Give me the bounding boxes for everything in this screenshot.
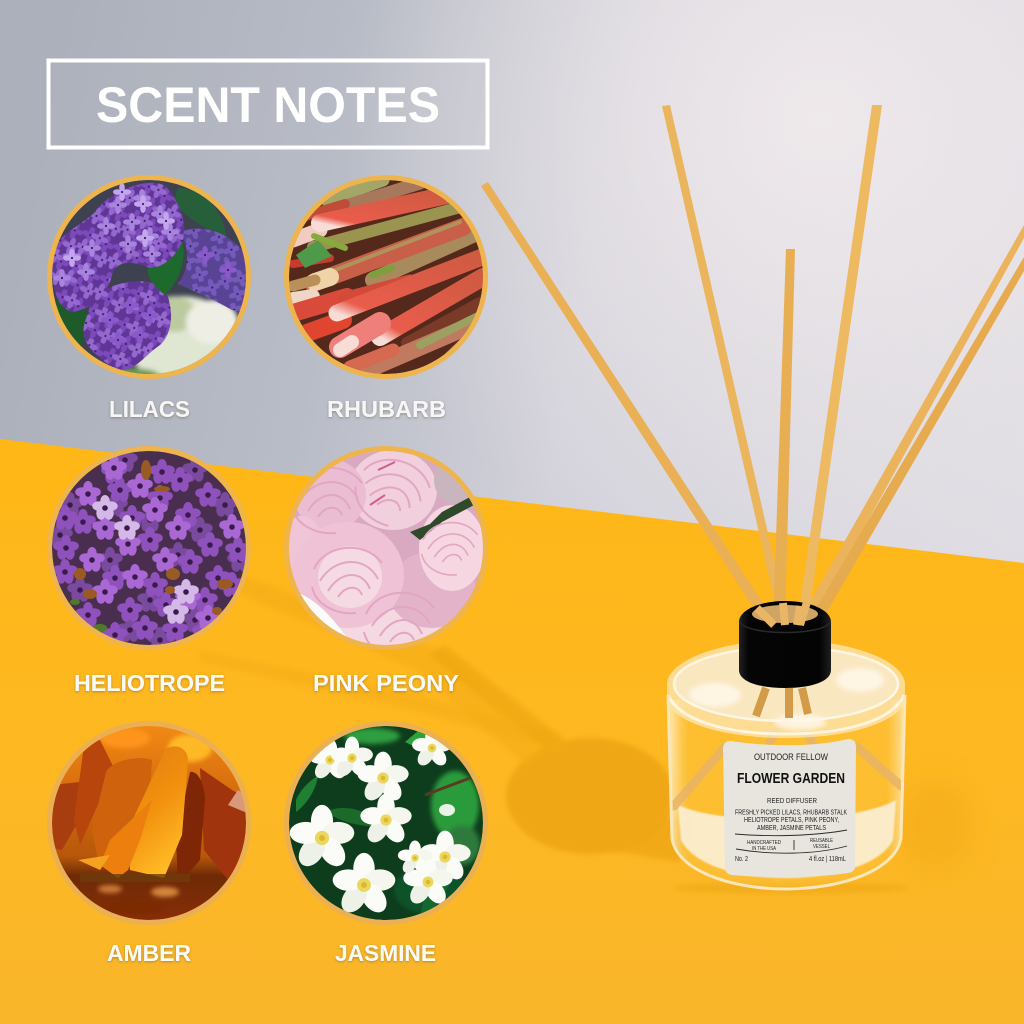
product label	[723, 739, 856, 877]
label footnotes: HANDCRAFTED	[747, 840, 781, 846]
peony photo circle	[289, 451, 483, 645]
title text: SCENT NOTES	[96, 77, 440, 133]
ingredients: AMBER, JASMINE PETALS	[757, 825, 826, 832]
label number and size	[735, 856, 846, 863]
lilacs ring	[50, 178, 248, 376]
ingredients: HELIOTROPE PETALS, PINK PEONY,	[744, 817, 839, 824]
glass bottle	[667, 640, 905, 890]
heliotrope photo circle	[52, 451, 246, 645]
panel: pink peony	[280, 448, 486, 696]
label number and size: No. 2	[735, 856, 748, 863]
heliotrope label: HELIOTROPE	[74, 670, 225, 696]
label footnotes: VESSEL	[813, 844, 830, 850]
lilacs photo circle	[50, 178, 250, 384]
flower clusters	[178, 229, 248, 312]
glass shoulder inner oval	[674, 647, 898, 721]
leaves	[174, 188, 226, 236]
label sticker	[723, 739, 856, 877]
panel: amber	[50, 724, 252, 966]
peony ring	[286, 448, 486, 648]
panel: rhubarb	[286, 178, 486, 422]
peony label: PINK PEONY	[313, 670, 459, 696]
glass outline	[668, 695, 905, 889]
label footnotes: REUSABLE	[810, 838, 833, 844]
table shadows cast by diffuser	[200, 570, 973, 894]
brand name: OUTDOOR FELLOW	[754, 752, 828, 763]
yellow table surface	[0, 439, 1024, 1024]
jasmine ring	[286, 724, 486, 922]
panel: heliotrope	[47, 447, 253, 696]
inner reeds seen through glass	[674, 728, 901, 806]
black cap	[739, 601, 831, 688]
rhubarb label: RHUBARB	[327, 396, 446, 422]
reeds	[481, 105, 1024, 624]
title border	[48, 60, 488, 148]
jasmine label: JASMINE	[335, 940, 436, 966]
amber ring	[50, 724, 248, 922]
label number and size: 4 fl.oz | 118mL	[809, 856, 846, 863]
glass body	[670, 700, 905, 890]
liquid reflection	[678, 800, 896, 878]
heliotrope ring	[50, 448, 248, 648]
glass shoulder	[667, 640, 905, 738]
lilacs label: LILACS	[109, 396, 190, 422]
title box	[48, 60, 488, 148]
reed diffuser product	[481, 105, 1024, 890]
label rules	[735, 830, 847, 853]
amber label: AMBER	[107, 940, 191, 966]
rhubarb photo circle	[286, 178, 486, 378]
rhubarb ring	[286, 178, 486, 376]
reeds under cap	[756, 688, 808, 718]
panel: jasmine	[286, 724, 486, 966]
panel: lilacs	[50, 178, 250, 422]
jasmine photo circle	[286, 724, 486, 924]
product type: REED DIFFUSER	[767, 796, 817, 805]
amber photo circle	[50, 724, 252, 924]
ingredients	[735, 810, 847, 832]
label footnotes	[747, 838, 833, 852]
label footnotes: IN THE USA	[752, 846, 776, 852]
product name: FLOWER GARDEN	[737, 771, 845, 787]
shoulder reflections	[689, 668, 884, 730]
ingredients: FRESHLY PICKED LILACS, RHUBARB STALK	[735, 810, 847, 816]
glass shoulder band highlight	[668, 695, 904, 734]
